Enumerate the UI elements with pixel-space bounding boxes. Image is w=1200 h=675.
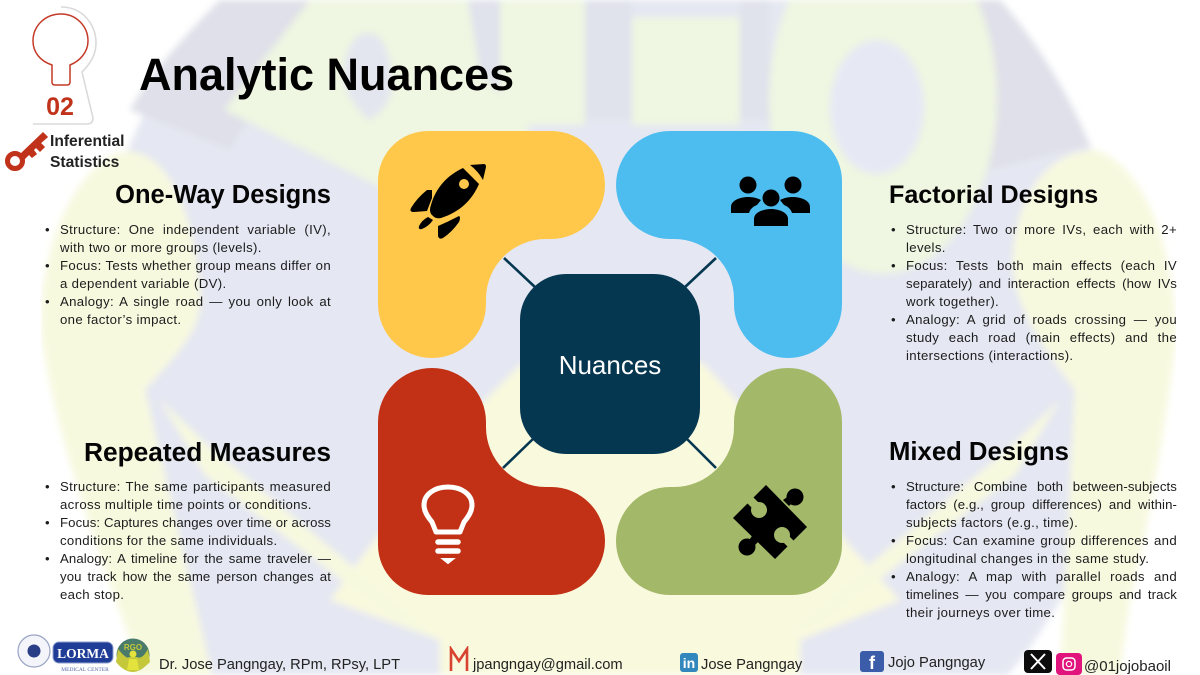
left arm	[41, 152, 212, 675]
section badge: keyhole 02 Inferential Statistics: Inferential	[50, 133, 125, 150]
footer: name: Dr. Jose Pangngay, RPm, RPsy, LPT	[159, 657, 400, 673]
footer: X and Instagram: @01jojobaoil	[1084, 658, 1171, 675]
bullet list: Structure: The same participants measured	[60, 479, 331, 494]
footer: Facebook: Jojo Pangngay	[888, 655, 985, 671]
bullet list: with two or more groups (levels).	[60, 240, 262, 255]
heading: One-Way Designs	[115, 181, 331, 209]
section badge: keyhole 02 Inferential Statistics	[5, 6, 125, 171]
heading: Repeated Measures	[84, 437, 331, 467]
footer: logos	[17, 634, 150, 673]
icon: light bulb	[424, 487, 472, 563]
icon: rocket	[410, 164, 486, 239]
connector lines	[503, 258, 716, 468]
bullet list: Analogy: A timeline for the same traveler —	[60, 551, 331, 566]
footer: LinkedIn	[680, 653, 802, 673]
bullet list: you track how the same person changes at	[60, 569, 331, 584]
body	[330, 342, 900, 675]
bullet list: timelines — you compare groups and track	[906, 587, 1177, 602]
bullet list: Structure: Combine both between-subjects	[906, 479, 1177, 494]
bullet list: Analogy: A single road — you only look at	[60, 294, 331, 309]
bullet list: conditions for the same individuals.	[60, 533, 278, 548]
bullet list: Structure: One independent variable (IV),	[60, 222, 331, 237]
heading: Mixed Designs	[889, 438, 1069, 466]
bullet list: factors (e.g., group differences) and within-	[906, 497, 1177, 512]
bullet list: study each road (main effects) and the	[906, 330, 1177, 345]
icon: group of people	[731, 176, 810, 226]
panel: Mixed Designs	[889, 438, 1177, 620]
bullet list: work together).	[906, 294, 999, 309]
bullet list: separately) and interaction effects (how IVs	[906, 276, 1177, 291]
bullet list: longitudinal changes in the same study.	[906, 551, 1149, 566]
footer: LinkedIn: in	[683, 655, 695, 671]
logo: seal	[18, 635, 50, 667]
section badge: keyhole 02 Inferential Statistics: 02	[46, 93, 74, 121]
bullet list	[892, 479, 1177, 620]
bullet list: a dependent variable (DV).	[60, 276, 226, 291]
hub: Nuances	[520, 274, 700, 454]
logo: Lorma	[53, 642, 113, 673]
bullet list: Analogy: A grid of roads crossing — you	[906, 312, 1177, 327]
bullet list	[46, 222, 331, 327]
footer: Facebook	[860, 651, 986, 672]
hub: Nuances: Nuances	[559, 350, 661, 380]
bullet list: across multiple time points or conditions.	[60, 497, 312, 512]
logo: RGO: RGO	[124, 643, 142, 652]
logo: Lorma: MEDICAL CENTER	[61, 667, 109, 673]
icon: puzzle piece	[733, 485, 807, 559]
bullet list: each stop.	[60, 587, 124, 602]
panel: Factorial Designs	[889, 181, 1177, 363]
bullet list: their journeys over time.	[906, 605, 1055, 620]
right arm	[1013, 150, 1176, 675]
footer: email	[450, 646, 623, 673]
bullet list: subjects factors (e.g., time).	[906, 515, 1078, 530]
petal: red bulb	[378, 368, 605, 595]
title: Analytic Nuances	[139, 49, 514, 100]
G	[500, 0, 585, 125]
petal: blue people	[616, 131, 842, 358]
panel: Repeated Measures	[46, 437, 331, 602]
logo: RGO	[116, 638, 150, 672]
bullet list: intersections (interactions).	[906, 348, 1073, 363]
bullet list: Focus: Captures changes over time or across	[60, 515, 331, 530]
bullet list: Focus: Tests both main effects (each IV	[906, 258, 1177, 273]
bullet list: one factor’s impact.	[60, 312, 181, 327]
petal: yellow rocket	[378, 131, 605, 358]
heading: Factorial Designs	[889, 181, 1098, 209]
bullet list	[46, 479, 331, 602]
bullet list: levels.	[906, 240, 946, 255]
petal: green puzzle	[616, 368, 842, 595]
R	[224, 0, 530, 200]
bullet list: Focus: Can examine group differences and	[906, 533, 1177, 548]
bullet list: Focus: Tests whether group means differ on	[60, 258, 331, 273]
panel: One-Way Designs	[46, 181, 331, 327]
footer: LinkedIn: Jose Pangngay	[701, 657, 802, 673]
footer: email: jpangngay@gmail.com	[473, 657, 623, 673]
bullet list: Analogy: A map with parallel roads and	[906, 569, 1177, 584]
bullet list: Structure: Two or more IVs, each with 2+	[906, 222, 1177, 237]
bullet list	[892, 222, 1177, 363]
section badge: keyhole 02 Inferential Statistics: Statistics	[50, 154, 120, 171]
O	[769, 0, 997, 274]
logo: Lorma: LORMA	[57, 646, 109, 661]
footer: X and Instagram	[1024, 650, 1171, 675]
